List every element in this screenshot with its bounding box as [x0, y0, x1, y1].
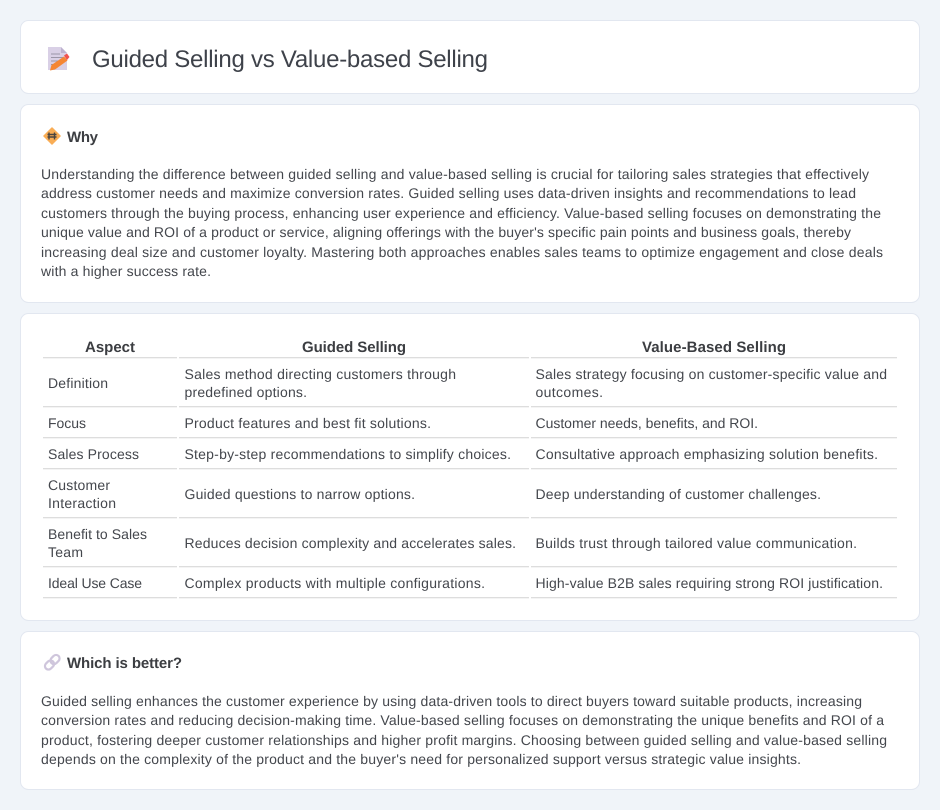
- table row: definition: [43, 366, 897, 407]
- table row: customer interaction: Interaction: [48, 495, 116, 511]
- table row: benefit to sales team: [43, 526, 897, 567]
- panel: header: [20, 20, 920, 94]
- text block: why paragraph: with a higher success rate.: [40, 263, 211, 279]
- text block: which is better paragraph: conversion rates and reducing decision-making time. Value-based selling focuses on demonstrating the unique benefits and ROI of a: [41, 712, 884, 728]
- heading: which is better: Which is better?: [67, 655, 182, 672]
- table header row: Aspect: [85, 339, 135, 356]
- text block: which is better paragraph: Guided selling enhances the customer experience by using data-driven tools to direct buyers toward suitable products, increasing: [41, 693, 862, 709]
- heading: why: Why: [67, 129, 99, 146]
- text block: why paragraph: [40, 166, 883, 279]
- title: Guided Selling vs Value-based Selling: [92, 46, 488, 73]
- table row: benefit to sales team: Builds trust through tailored value communication.: [536, 535, 857, 551]
- table header row: [43, 339, 897, 358]
- table row: sales process: Sales Process: [48, 446, 139, 462]
- table row: definition: Definition: [48, 375, 108, 391]
- text block: which is better paragraph: depends on the complexity of the product and the buyer's need for personalized support versus strategic value insights.: [41, 751, 801, 767]
- table row: definition: Sales strategy focusing on customer-specific value and: [536, 366, 887, 382]
- table row: focus: [43, 415, 897, 438]
- table row: sales process: Consultative approach emphasizing solution benefits.: [536, 446, 878, 462]
- table row: benefit to sales team: Reduces decision complexity and accelerates sales.: [184, 535, 516, 551]
- table row: ideal use case: High-value B2B sales requiring strong ROI justification.: [536, 575, 883, 591]
- text block: which is better paragraph: [41, 693, 887, 767]
- table row: customer interaction: [43, 477, 897, 518]
- table row: ideal use case: Ideal Use Case: [48, 575, 142, 591]
- table row: customer interaction: Customer: [48, 477, 110, 493]
- table row: definition: predefined options.: [184, 384, 307, 400]
- table row: ideal use case: [43, 575, 897, 598]
- table row: ideal use case: Complex products with multiple configurations.: [184, 575, 485, 591]
- icon: chain link: [43, 653, 61, 671]
- table row: customer interaction: Deep understanding of customer challenges.: [536, 486, 821, 502]
- table row: definition: Sales method directing customers through: [184, 366, 456, 382]
- text block: why paragraph: address customer needs and maximize conversion rates. Guided selling uses data-driven insights and recommendations to lead: [41, 185, 856, 201]
- table row: sales process: Step-by-step recommendations to simplify choices.: [184, 446, 511, 462]
- icon: orange diamond road sign: [44, 128, 60, 144]
- panel: comparison table: [20, 314, 920, 620]
- table header row: Value-Based Selling: [642, 339, 786, 356]
- table header row: Guided Selling: [302, 339, 406, 356]
- table row: focus: Customer needs, benefits, and ROI.: [536, 415, 758, 431]
- table row: focus: Product features and best fit solutions.: [184, 415, 431, 431]
- text block: why paragraph: Understanding the difference between guided selling and value-based selling is crucial for tailoring sales strategies that effectively: [41, 166, 869, 182]
- table row: benefit to sales team: Team: [48, 544, 83, 560]
- table row: benefit to sales team: Benefit to Sales: [48, 526, 147, 542]
- panel: why: [20, 104, 920, 302]
- text block: which is better paragraph: product, fostering deeper customer relationships and higher profit margins. Choosing between guided selling and value-based selling: [41, 732, 887, 748]
- icon: document with pencil: [48, 47, 70, 70]
- panel: which is better: [20, 632, 920, 790]
- table row: sales process: [43, 446, 897, 469]
- table row: definition: outcomes.: [536, 384, 603, 400]
- table row: focus: Focus: [48, 415, 86, 431]
- table row: customer interaction: Guided questions to narrow options.: [184, 486, 415, 502]
- text block: why paragraph: increasing deal size and customer loyalty. Mastering both approaches enables sales teams to optimize engagement and close deals: [41, 244, 883, 260]
- text block: why paragraph: unique value and ROI of a product or service, aligning offerings with the buyer's specific pain points and business goals, thereby: [41, 224, 851, 240]
- text block: why paragraph: customers through the buying process, enhancing user experience and efficiency. Value-based selling focuses on demonstrating the: [41, 205, 881, 221]
